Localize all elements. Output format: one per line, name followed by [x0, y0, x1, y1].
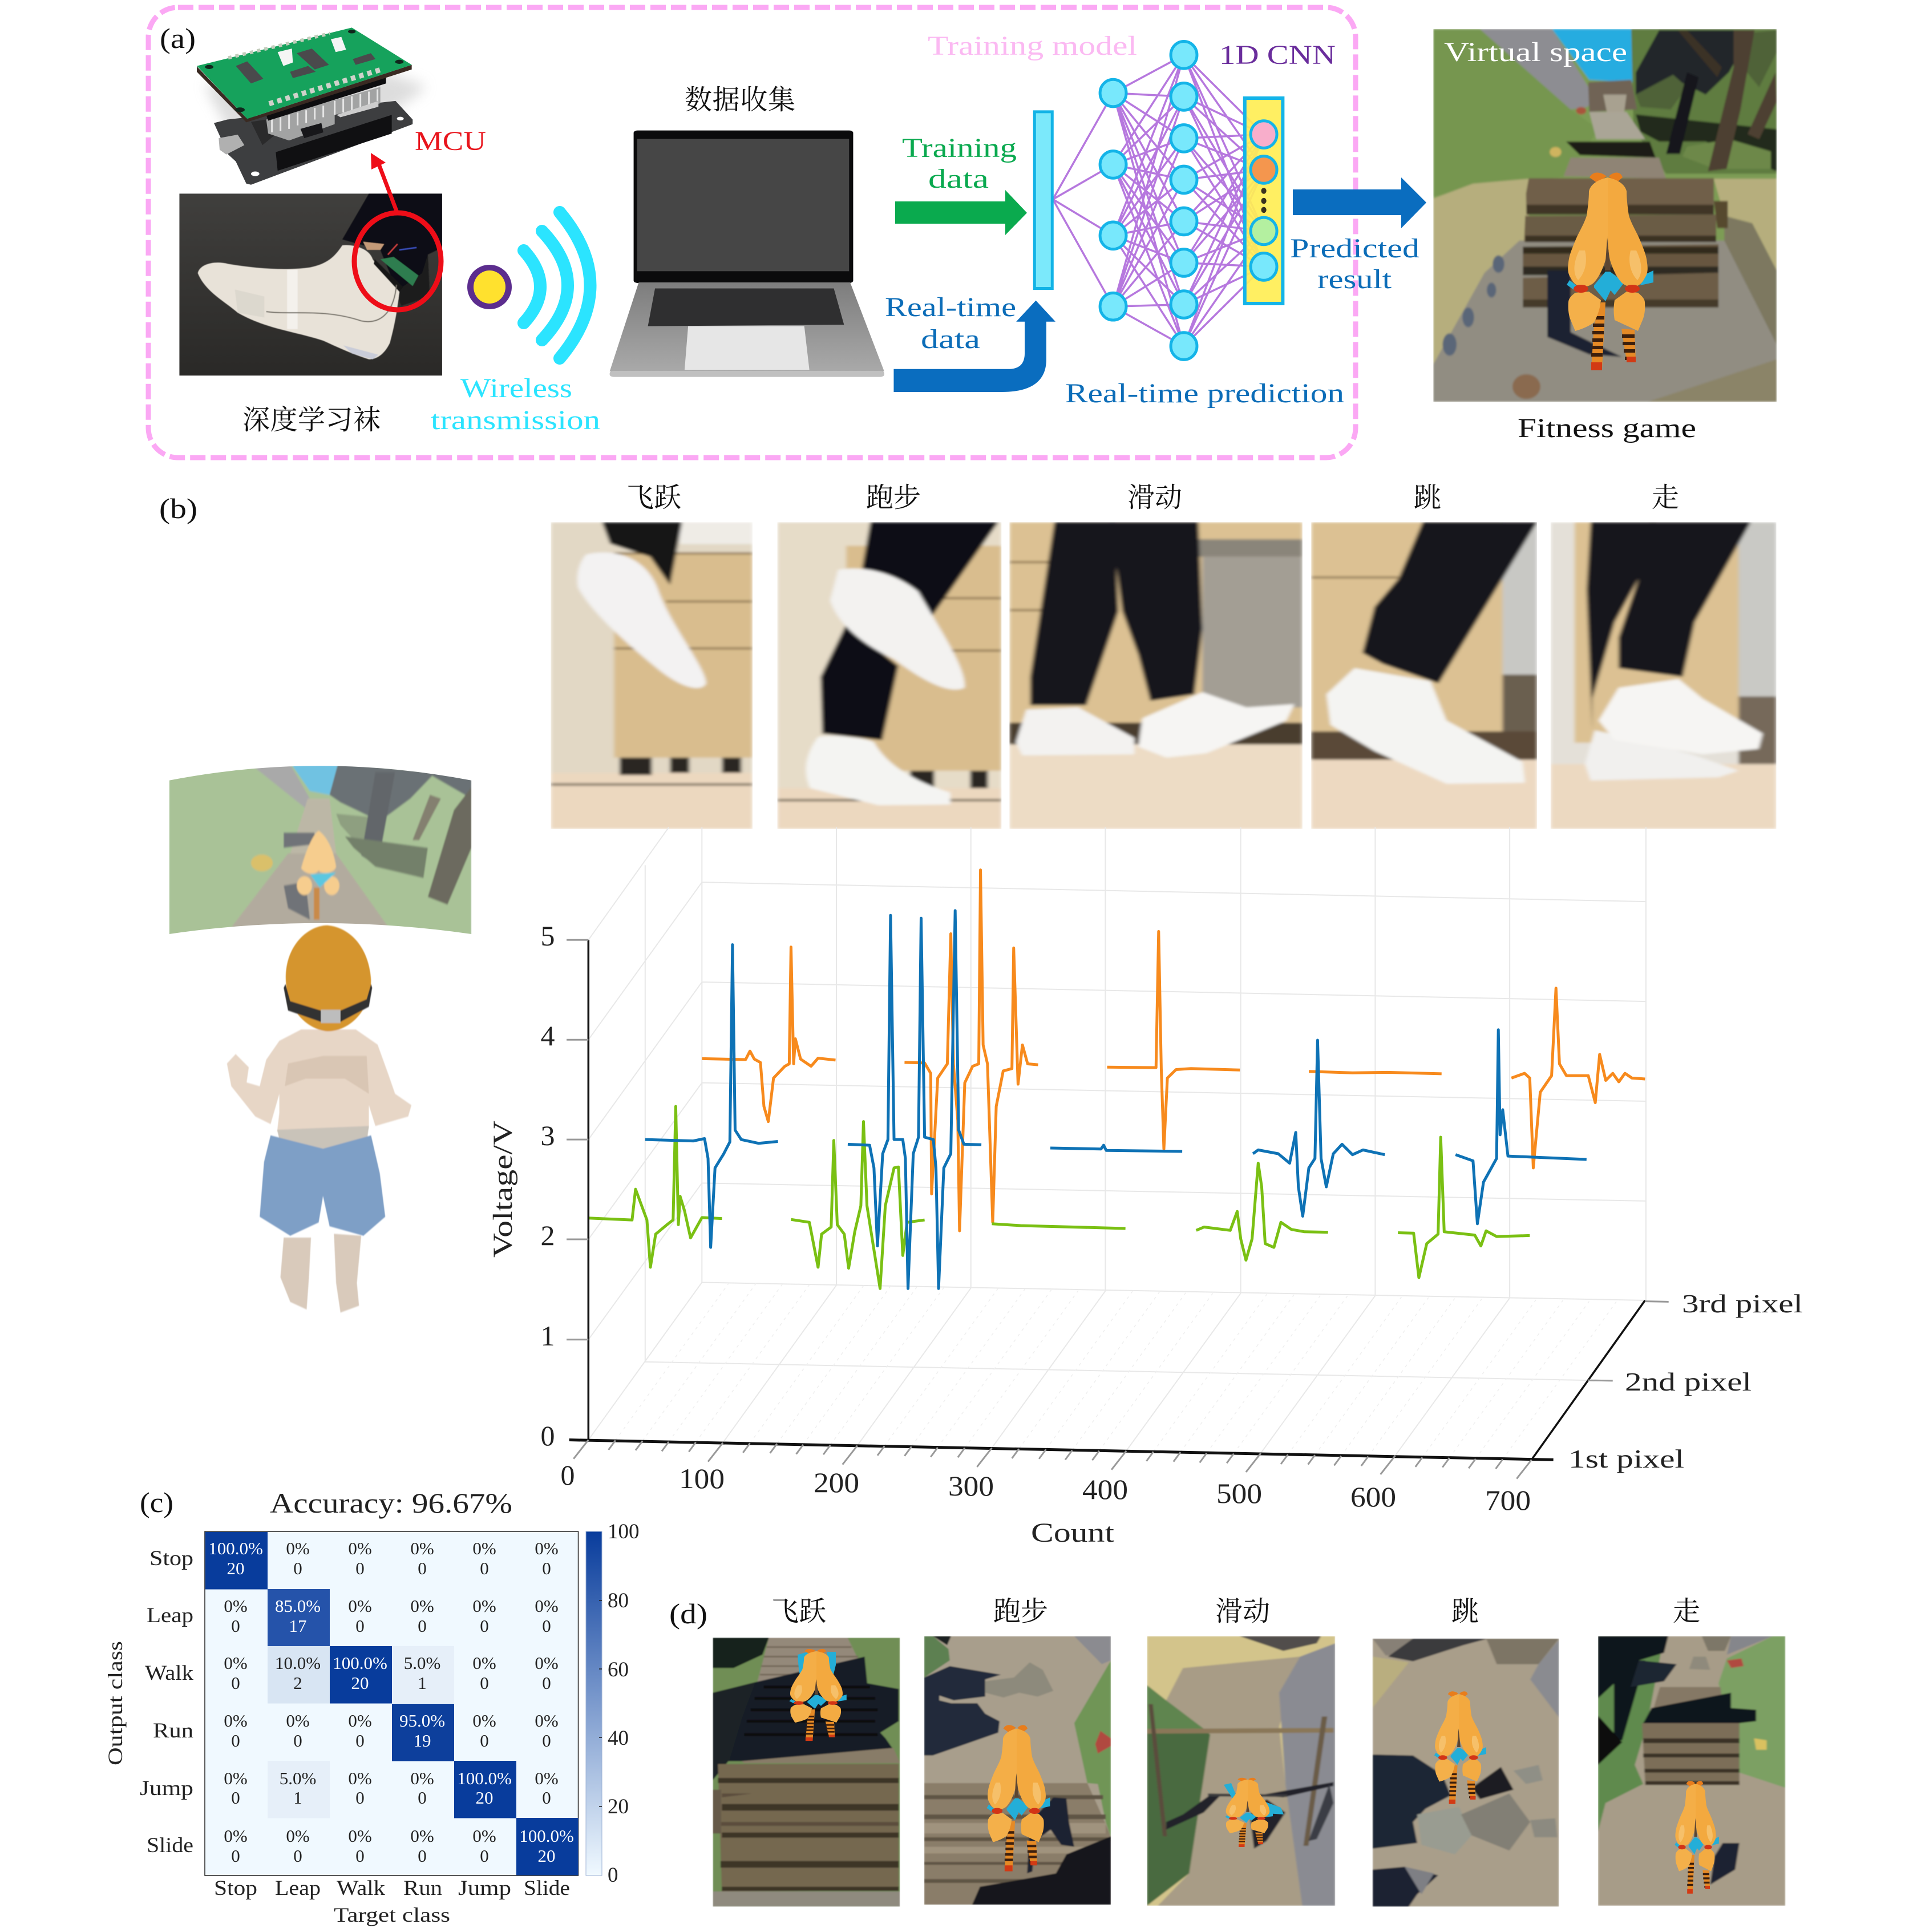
- x axis tick labels: 0: [560, 1459, 575, 1491]
- panel: fitness game scene: [1433, 29, 1777, 443]
- photo: sock on foot: [179, 193, 442, 375]
- column labels: Jump: [458, 1877, 511, 1900]
- action labels row: 跳: [1414, 483, 1441, 513]
- cell values: 0%: [535, 1768, 559, 1788]
- cell values: 0%: [472, 1826, 496, 1846]
- cell values: 5.0%: [404, 1653, 440, 1673]
- arrow: result to game: [1293, 177, 1426, 228]
- arrow: real-time data: [893, 301, 1055, 392]
- panel b label: (b): [159, 492, 197, 524]
- column labels: [214, 1877, 570, 1900]
- cell values: 0: [355, 1846, 365, 1866]
- cell values: 10.0%: [275, 1653, 321, 1673]
- traces: blue second pixel: [645, 911, 1587, 1288]
- row labels: Stop: [149, 1547, 193, 1570]
- caption: fitness game: Fitness game: [1518, 413, 1696, 443]
- photo: slide: [1009, 522, 1303, 829]
- wireless transmission label: Wireless: [460, 373, 572, 403]
- x axis tick labels: 500: [1216, 1477, 1262, 1509]
- cell values: 0: [542, 1788, 551, 1808]
- cell values: 0: [418, 1788, 427, 1808]
- icon: MCU circuit board: [197, 27, 428, 185]
- cell values: 0%: [348, 1768, 372, 1788]
- cell values: 0: [418, 1616, 427, 1636]
- wireless transmission label: transmission: [431, 405, 600, 435]
- input bar: [1034, 112, 1052, 288]
- caption: deep learning sock: 深度学习袜: [242, 405, 381, 435]
- cell values: 0: [293, 1731, 302, 1751]
- training data label: [902, 133, 1017, 194]
- cell values: 0: [231, 1731, 240, 1751]
- avatar: jump: [1434, 1691, 1486, 1804]
- wireless transmission label: [431, 373, 600, 435]
- icon: wireless signal: [467, 212, 590, 358]
- real-time data label: [885, 292, 1016, 354]
- row labels: Run: [153, 1719, 193, 1743]
- dotted minor floor grid: [616, 1283, 1616, 1460]
- cell values: 0: [418, 1846, 427, 1866]
- cell values: 0%: [410, 1826, 434, 1846]
- x axis tick labels: 300: [948, 1470, 994, 1502]
- panel: player with VR headset and curved screen: [169, 761, 471, 1312]
- avatar: slide: [1224, 1778, 1284, 1847]
- callout: red circle and arrow to MCU: [354, 153, 441, 310]
- label c: (c): [140, 1486, 173, 1518]
- cell values: 0: [231, 1846, 240, 1866]
- cell values: 1: [293, 1788, 302, 1808]
- cell values: 0%: [224, 1768, 248, 1788]
- cell values: 0: [418, 1558, 427, 1578]
- training data label: Training: [902, 133, 1017, 163]
- colour bar: 80: [608, 1589, 629, 1612]
- cell values: 0%: [348, 1711, 372, 1731]
- cell values: 0: [480, 1558, 489, 1578]
- cell values: 100.0%: [208, 1538, 263, 1558]
- ellipsis dots: [1261, 188, 1267, 213]
- MCU label: MCU: [415, 126, 486, 156]
- cell values: 0%: [286, 1826, 310, 1846]
- cell values: [208, 1538, 574, 1866]
- network connections: [1053, 55, 1184, 346]
- predicted result label: [1290, 233, 1419, 294]
- cell values: 0%: [410, 1596, 434, 1616]
- y axis tick labels: 0: [541, 1420, 555, 1452]
- cell values: 20: [476, 1788, 493, 1808]
- cell values: 2: [293, 1673, 302, 1693]
- depth axis labels: 3rd pixel: [1682, 1289, 1803, 1318]
- cell values: 0: [542, 1673, 551, 1693]
- colour bar: [586, 1520, 639, 1887]
- cell values: 95.0%: [399, 1711, 445, 1731]
- in-game action labels: 跳: [1451, 1596, 1479, 1627]
- x axis tick labels: 600: [1350, 1481, 1396, 1513]
- cell values: 5.0%: [280, 1768, 316, 1788]
- y axis tick labels: [541, 920, 555, 1452]
- figure: person back view: [227, 925, 411, 1312]
- cell values: 0%: [224, 1653, 248, 1673]
- colour bar: 20: [608, 1795, 629, 1818]
- avatar: run: [986, 1725, 1050, 1872]
- label d: (d): [669, 1598, 707, 1630]
- row labels: Leap: [147, 1604, 193, 1627]
- traces: orange third pixel: [702, 870, 1645, 1231]
- avatar: walk: [1675, 1781, 1719, 1894]
- network outputs: [1184, 55, 1264, 346]
- cell values: 0: [231, 1788, 240, 1808]
- cell values: 0: [480, 1731, 489, 1751]
- cell values: 20: [351, 1673, 369, 1693]
- cell values: 0: [480, 1846, 489, 1866]
- cell values: 20: [227, 1558, 244, 1578]
- game frame: walk: [1598, 1636, 1785, 1906]
- grid lines: [588, 827, 1646, 1460]
- panel d: in-game actions: [669, 1596, 1785, 1907]
- column labels: Slide: [524, 1877, 570, 1900]
- cell values: 0%: [410, 1768, 434, 1788]
- data collection label: 数据收集: [685, 85, 795, 115]
- cell values: 0: [480, 1616, 489, 1636]
- depth axis labels: 2nd pixel: [1625, 1367, 1752, 1396]
- y axis title: Voltage/V: [488, 1121, 518, 1258]
- row labels: [140, 1547, 194, 1857]
- column labels: Stop: [214, 1877, 257, 1900]
- x axis tick labels: 400: [1082, 1473, 1128, 1505]
- chart: 3D voltage waterfall: [488, 827, 1803, 1548]
- x axis tick labels: [560, 1459, 1531, 1516]
- cell values: 0%: [224, 1826, 248, 1846]
- cell values: 0%: [472, 1596, 496, 1616]
- game frame: slide: [1147, 1636, 1335, 1906]
- photo: run: [777, 522, 1001, 829]
- cell values: 0%: [286, 1711, 310, 1731]
- row labels: Slide: [147, 1834, 193, 1857]
- output layer: [1245, 98, 1283, 304]
- x axis tick labels: 700: [1485, 1484, 1531, 1516]
- cell values: 17: [289, 1616, 307, 1636]
- y axis tick labels: 3: [541, 1119, 555, 1151]
- cell values: 0%: [224, 1711, 248, 1731]
- output class axis title: Output class: [104, 1641, 127, 1765]
- icon: laptop: [610, 131, 884, 377]
- x axis tick labels: 100: [679, 1462, 725, 1494]
- label a: (a): [160, 22, 196, 54]
- cell values: 0: [355, 1558, 365, 1578]
- in-game action labels: 飞跃: [771, 1596, 826, 1627]
- cell values: 0%: [224, 1596, 248, 1616]
- cell values: 0: [293, 1558, 302, 1578]
- cell values: 0%: [286, 1538, 310, 1558]
- game frame: leap: [713, 1638, 900, 1907]
- panel a: system pipeline: [148, 7, 1426, 458]
- matrix title: Accuracy: 96.67%: [270, 1487, 512, 1519]
- cell values: 0%: [348, 1538, 372, 1558]
- photo: jump: [1311, 522, 1537, 829]
- 1D CNN label: 1D CNN: [1219, 40, 1336, 70]
- action labels row: [626, 483, 1679, 513]
- axes: [588, 940, 1645, 1460]
- cell values: 0%: [535, 1538, 559, 1558]
- column labels: Walk: [337, 1877, 386, 1900]
- cell values: 0%: [348, 1596, 372, 1616]
- cell values: 0%: [535, 1653, 559, 1673]
- cell values: 20: [537, 1846, 556, 1866]
- heatmap cells: [205, 1531, 579, 1876]
- game frame: run: [924, 1636, 1111, 1905]
- y axis tick labels: 4: [541, 1020, 555, 1052]
- training data label: data: [928, 164, 989, 194]
- real-time prediction label: Real-time prediction: [1065, 378, 1344, 409]
- cell values: 0: [542, 1616, 551, 1636]
- colour bar: 40: [608, 1727, 629, 1750]
- cell values: 1: [418, 1673, 427, 1693]
- traces: green first pixel: [588, 1106, 1530, 1288]
- panel: foot motion photos: [551, 522, 1776, 829]
- avatar: leap: [789, 1649, 847, 1741]
- cell values: 0%: [535, 1596, 559, 1616]
- arrow: training data: [895, 190, 1027, 235]
- cell values: 19: [413, 1731, 431, 1751]
- virtual space label: Virtual space: [1444, 37, 1627, 67]
- cell values: 0: [480, 1673, 489, 1693]
- action labels row: 滑动: [1127, 483, 1182, 513]
- action labels row: 跑步: [866, 483, 921, 513]
- depth axis labels: 1st pixel: [1568, 1444, 1684, 1473]
- cell values: 0%: [472, 1653, 496, 1673]
- predicted result label: result: [1317, 264, 1392, 294]
- output nodes: [1251, 121, 1277, 280]
- column labels: Leap: [275, 1877, 321, 1900]
- cell values: 0: [355, 1616, 365, 1636]
- depth axis labels: [1568, 1289, 1803, 1473]
- panel: confusion matrix: [104, 1486, 639, 1926]
- cell values: 85.0%: [275, 1596, 321, 1616]
- photo: walk: [1551, 522, 1776, 829]
- action labels row: 走: [1652, 483, 1679, 513]
- training model label: Training model: [928, 31, 1137, 61]
- cell values: 0: [231, 1616, 240, 1636]
- real-time data label: Real-time: [885, 292, 1016, 322]
- predicted result label: Predicted: [1290, 233, 1419, 264]
- colour bar: 100: [608, 1520, 639, 1543]
- cell values: 0%: [472, 1538, 496, 1558]
- column labels: Run: [403, 1877, 442, 1900]
- row labels: Walk: [145, 1662, 194, 1685]
- real-time data label: data: [921, 324, 980, 354]
- cell values: 0%: [535, 1711, 559, 1731]
- in-game action labels: [771, 1596, 1700, 1627]
- hidden nodes: [1100, 42, 1197, 359]
- character: game avatar: [1567, 172, 1653, 370]
- target class axis title: Target class: [334, 1903, 450, 1926]
- x axis tick labels: 200: [814, 1466, 859, 1498]
- y axis tick labels: 2: [541, 1219, 555, 1251]
- colour bar: 60: [608, 1658, 629, 1682]
- cell values: 100.0%: [457, 1768, 512, 1788]
- curved panorama screen: [169, 761, 471, 939]
- axis ticks: [567, 940, 1669, 1479]
- in-game action labels: 跑步: [993, 1596, 1048, 1627]
- chart: 1D CNN network: [1034, 42, 1283, 359]
- cell values: 100.0%: [333, 1653, 387, 1673]
- cell values: 100.0%: [519, 1826, 574, 1846]
- cell values: 0: [542, 1558, 551, 1578]
- in-game action labels: 滑动: [1215, 1596, 1270, 1627]
- x axis title: Count: [1031, 1518, 1115, 1548]
- row labels: Jump: [140, 1777, 193, 1800]
- cell values: 0: [355, 1788, 365, 1808]
- dashed pink border: [148, 7, 1356, 458]
- photo: leap: [551, 522, 753, 829]
- cell values: 0%: [472, 1711, 496, 1731]
- cell values: 0: [231, 1673, 240, 1693]
- cell values: 0: [355, 1731, 365, 1751]
- cell values: 0: [293, 1846, 302, 1866]
- cell values: 0%: [348, 1826, 372, 1846]
- cell values: 0: [542, 1731, 551, 1751]
- y axis tick labels: 1: [541, 1320, 555, 1352]
- in-game action labels: 走: [1673, 1596, 1700, 1627]
- cell values: 0%: [410, 1538, 434, 1558]
- colour bar: 0: [608, 1864, 618, 1887]
- y axis tick labels: 5: [541, 920, 555, 952]
- action labels row: 飞跃: [626, 483, 681, 513]
- game frame: jump: [1373, 1639, 1559, 1907]
